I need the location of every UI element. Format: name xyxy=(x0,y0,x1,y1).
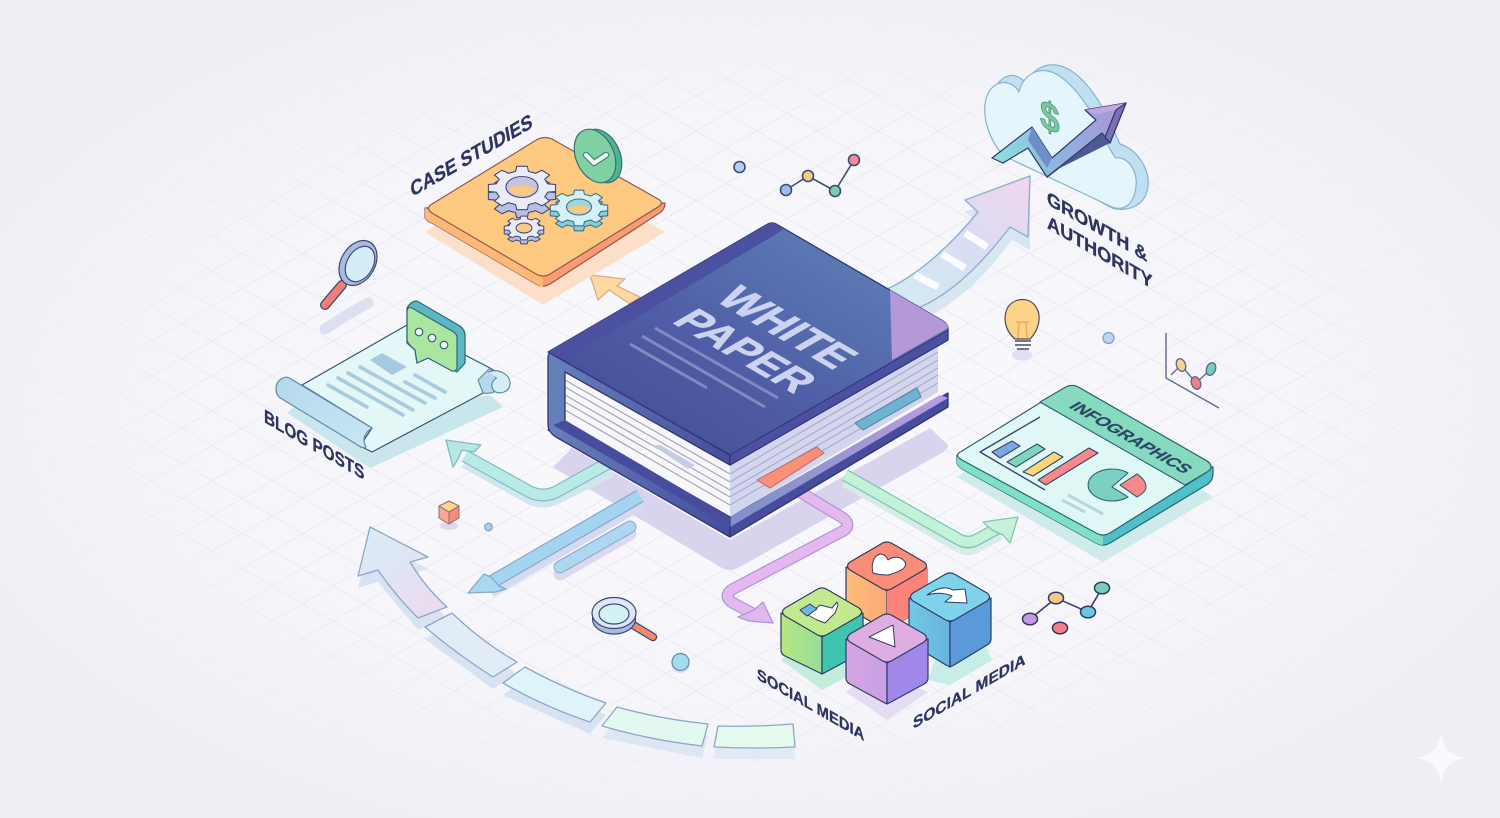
caption lines xyxy=(1062,495,1103,514)
play icon xyxy=(869,625,895,647)
pie chart xyxy=(1088,469,1146,501)
right curl xyxy=(478,368,510,393)
page block xyxy=(565,343,938,517)
check badge xyxy=(566,123,630,189)
scroll roller xyxy=(276,377,372,448)
purple cube xyxy=(846,614,928,704)
label xyxy=(1047,188,1153,294)
green cube shadow xyxy=(781,650,866,690)
title band xyxy=(1040,386,1211,485)
large gear xyxy=(488,166,556,218)
arc segment xyxy=(714,724,795,748)
cloud front xyxy=(985,71,1136,208)
magnifier shadow xyxy=(325,303,368,329)
labels: SOCIAL MEDIA xyxy=(913,651,1026,733)
small orange cube xyxy=(439,501,459,530)
arrow to lower left xyxy=(468,496,640,593)
growth arrow xyxy=(992,103,1126,178)
node graph top xyxy=(734,154,860,196)
cover title: PAPER xyxy=(662,303,827,399)
dot xyxy=(1103,332,1114,344)
blue cube shadow xyxy=(928,645,992,685)
plate shadow xyxy=(957,465,1213,562)
panel: infographics: INFOGRAPHICS xyxy=(1065,399,1197,476)
curved progress arrow xyxy=(358,527,795,759)
bottom cover xyxy=(548,393,948,537)
icon: lightbulb xyxy=(1005,300,1039,360)
cover title: WHITE xyxy=(705,279,869,375)
teal gear xyxy=(550,190,608,231)
arrow to social media xyxy=(728,492,848,623)
labels: SOCIAL MEDIA xyxy=(757,666,865,745)
panel: case studies xyxy=(409,110,665,305)
cover title xyxy=(662,279,869,399)
spine xyxy=(548,353,730,537)
cloud back xyxy=(991,65,1148,209)
label: BLOG POSTS xyxy=(264,406,364,485)
plate top xyxy=(958,386,1211,535)
arc segment xyxy=(602,707,708,746)
label: CASE STUDIES xyxy=(409,110,534,202)
panel: social media cubes xyxy=(757,542,1026,745)
panel: infographics xyxy=(957,386,1213,562)
arrow to case studies xyxy=(590,275,640,304)
central book: white paper xyxy=(548,223,948,537)
mini line chart xyxy=(1166,333,1219,408)
arrow head xyxy=(358,527,447,618)
labels xyxy=(757,651,1026,745)
panel: growth and authority xyxy=(985,65,1153,294)
speech bubble xyxy=(407,301,465,372)
plate shadow xyxy=(425,218,665,305)
arc segment xyxy=(425,613,517,677)
orange cube xyxy=(846,542,928,631)
heart icon xyxy=(872,554,906,575)
magnifying glass xyxy=(325,234,385,305)
blog text lines xyxy=(328,353,445,415)
blue cube xyxy=(909,573,991,667)
scroll paper xyxy=(302,325,503,452)
arrow to infographics xyxy=(845,475,1018,549)
bar chart xyxy=(980,417,1098,490)
label: GROWTH & xyxy=(1047,188,1148,267)
watermark sparkle xyxy=(1415,732,1467,784)
blue bookmark xyxy=(855,388,921,430)
dollar sign: $ xyxy=(1040,91,1060,144)
arrow to blog posts xyxy=(446,440,612,501)
dot xyxy=(672,654,690,673)
cover text lines xyxy=(630,328,778,407)
arc segment xyxy=(503,667,606,722)
book cover xyxy=(548,223,948,465)
small gear xyxy=(504,216,544,244)
thumbs up icon xyxy=(800,602,838,623)
rising arrow to growth xyxy=(885,176,1030,322)
orange bookmark xyxy=(757,447,824,488)
plate xyxy=(425,203,665,286)
magnifying glass lower xyxy=(592,598,653,637)
small dot xyxy=(485,523,492,531)
share arrow icon xyxy=(927,588,967,603)
label: AUTHORITY xyxy=(1047,212,1153,294)
scroll shadow xyxy=(287,395,503,468)
green cube xyxy=(781,588,863,674)
book shadow xyxy=(553,428,948,570)
plate sides xyxy=(957,455,1213,545)
panel: blog posts xyxy=(264,234,510,485)
node graph lower right xyxy=(1022,582,1110,634)
purple cube shadow xyxy=(846,680,928,720)
